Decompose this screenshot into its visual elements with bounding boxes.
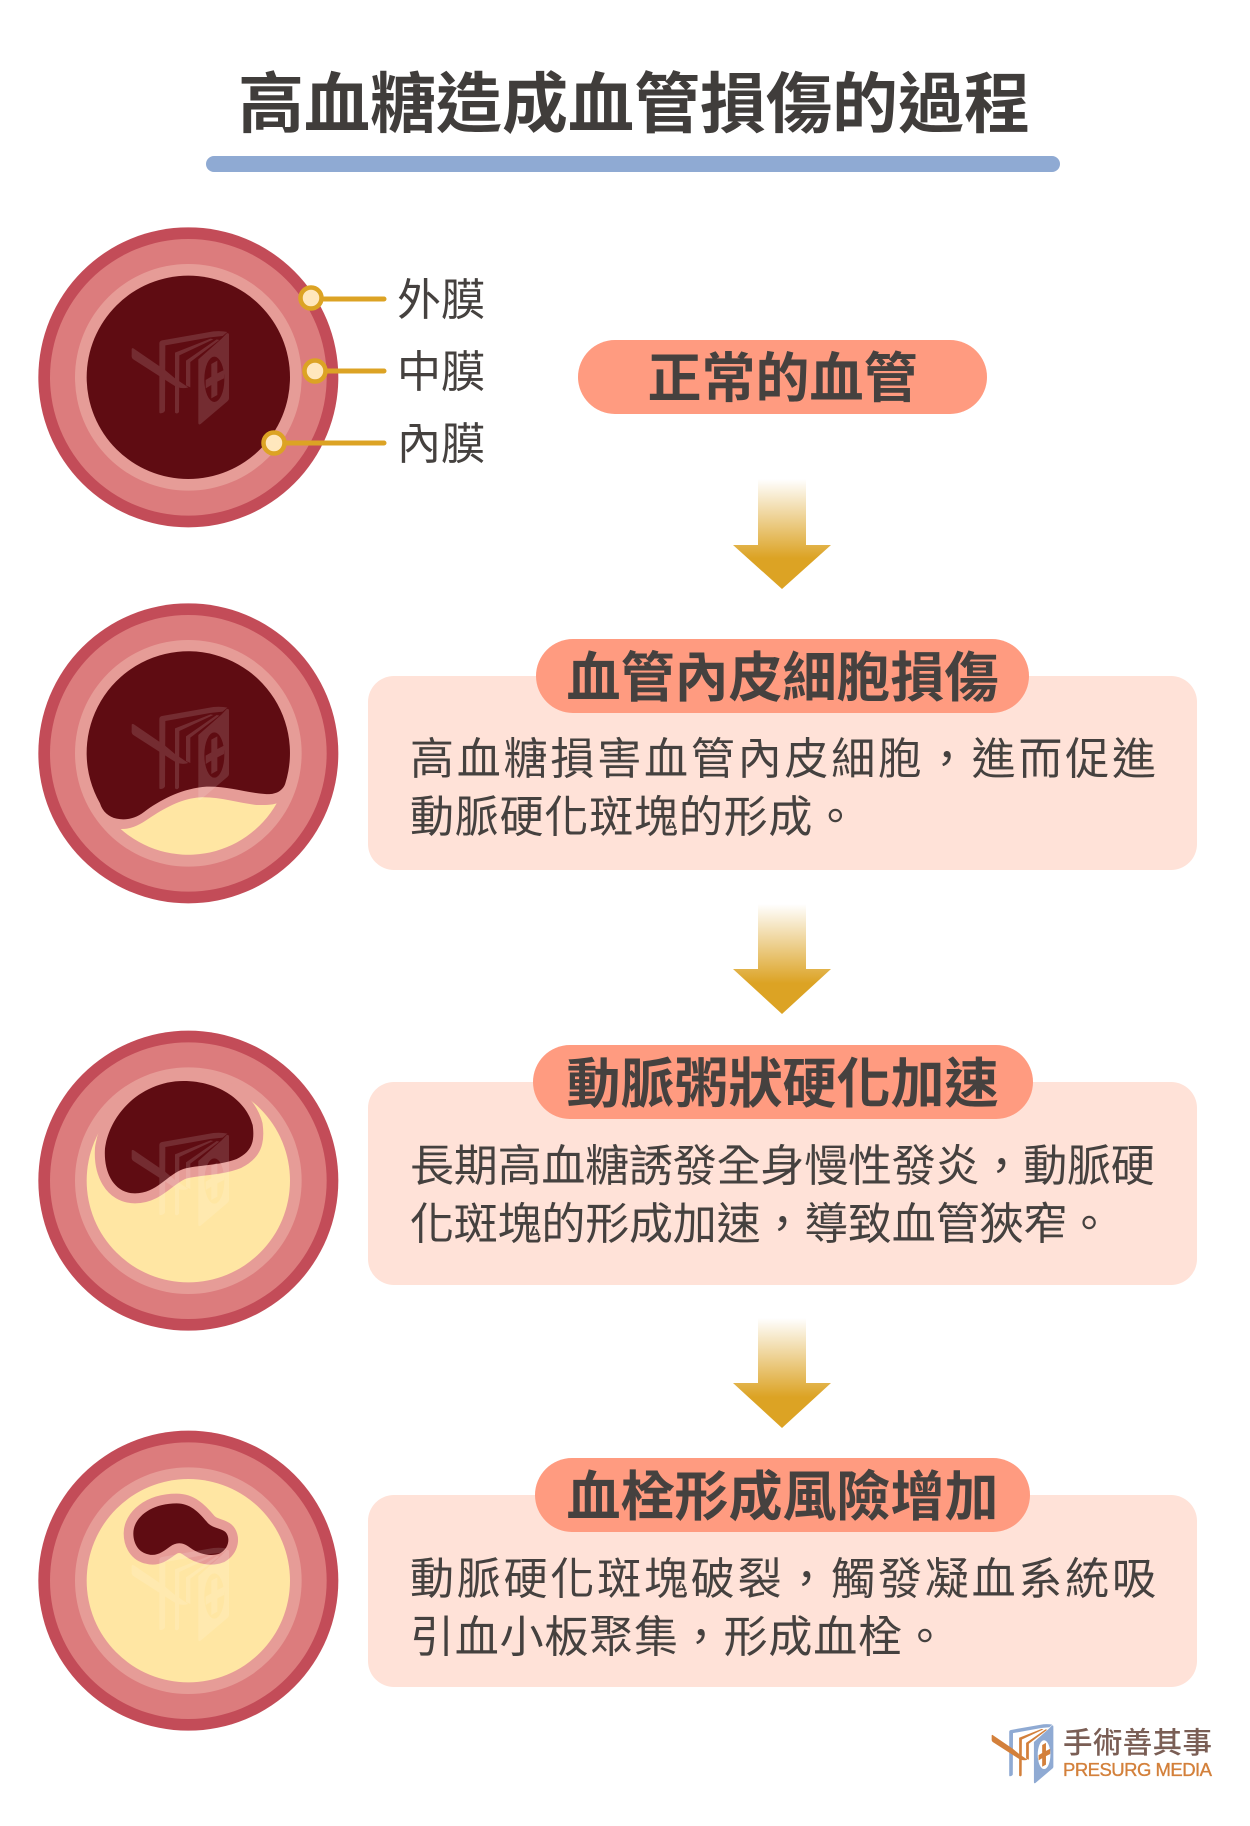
body text: 長期高血糖誘發全身慢性發炎，動脈硬 [410,1142,1155,1191]
vessel diagram: normal artery [38,227,338,527]
vessel diagram: accelerated atherosclerosis [38,1031,338,1331]
heading pill: normal vessel: 正常的血管 [648,349,918,409]
callout: middle membrane [304,348,485,397]
icon: book and scalpel logo [992,1724,1053,1783]
callout: middle membrane: 中膜 [397,348,485,397]
body text: 動脈硬化斑塊的形成。 [410,793,858,842]
body text [410,735,1159,842]
callout: inner membrane: 內膜 [397,420,485,469]
heading pill: 動脈粥狀硬化加速 [566,1054,998,1114]
body text [410,1555,1159,1662]
callout: inner membrane [264,420,485,469]
logo wordmark: PRESURG MEDIA [1063,1759,1213,1780]
heading pill: normal vessel [578,340,987,414]
body text [410,1142,1155,1249]
body text: 引血小板聚集，形成血栓。 [410,1613,948,1662]
body text: 高血糖損害血管內皮細胞，進而促進 [410,735,1159,784]
title: 高血糖造成血管損傷的過程 [238,67,1030,141]
body text: 動脈硬化斑塊破裂，觸發凝血系統吸 [410,1555,1159,1604]
heading pill: 血栓形成風險增加 [566,1468,998,1528]
title underline bar [206,156,1060,172]
arrow 1 [733,479,831,589]
logo wordmark: 手術善其事 [1063,1727,1212,1760]
logo wordmark [1063,1727,1213,1780]
arrow 3 [733,1318,831,1428]
panel: endothelial damage [368,639,1197,870]
logo: Presurg Media [992,1724,1213,1783]
arrow 2 [733,904,831,1014]
callout: outer membrane: 外膜 [397,276,485,325]
callout: outer, middle and inner membrane labels [264,276,485,469]
heading pill: 血管內皮細胞損傷 [566,648,998,708]
panel: thrombus formation [368,1458,1197,1687]
body text: 化斑塊的形成加速，導致血管狹窄。 [410,1200,1111,1249]
panel: accelerated atherosclerosis [368,1045,1197,1285]
callout: outer membrane [300,276,485,325]
vessel diagram: thrombus formation [38,1431,338,1731]
vessel diagram: endothelial damage [38,603,338,903]
